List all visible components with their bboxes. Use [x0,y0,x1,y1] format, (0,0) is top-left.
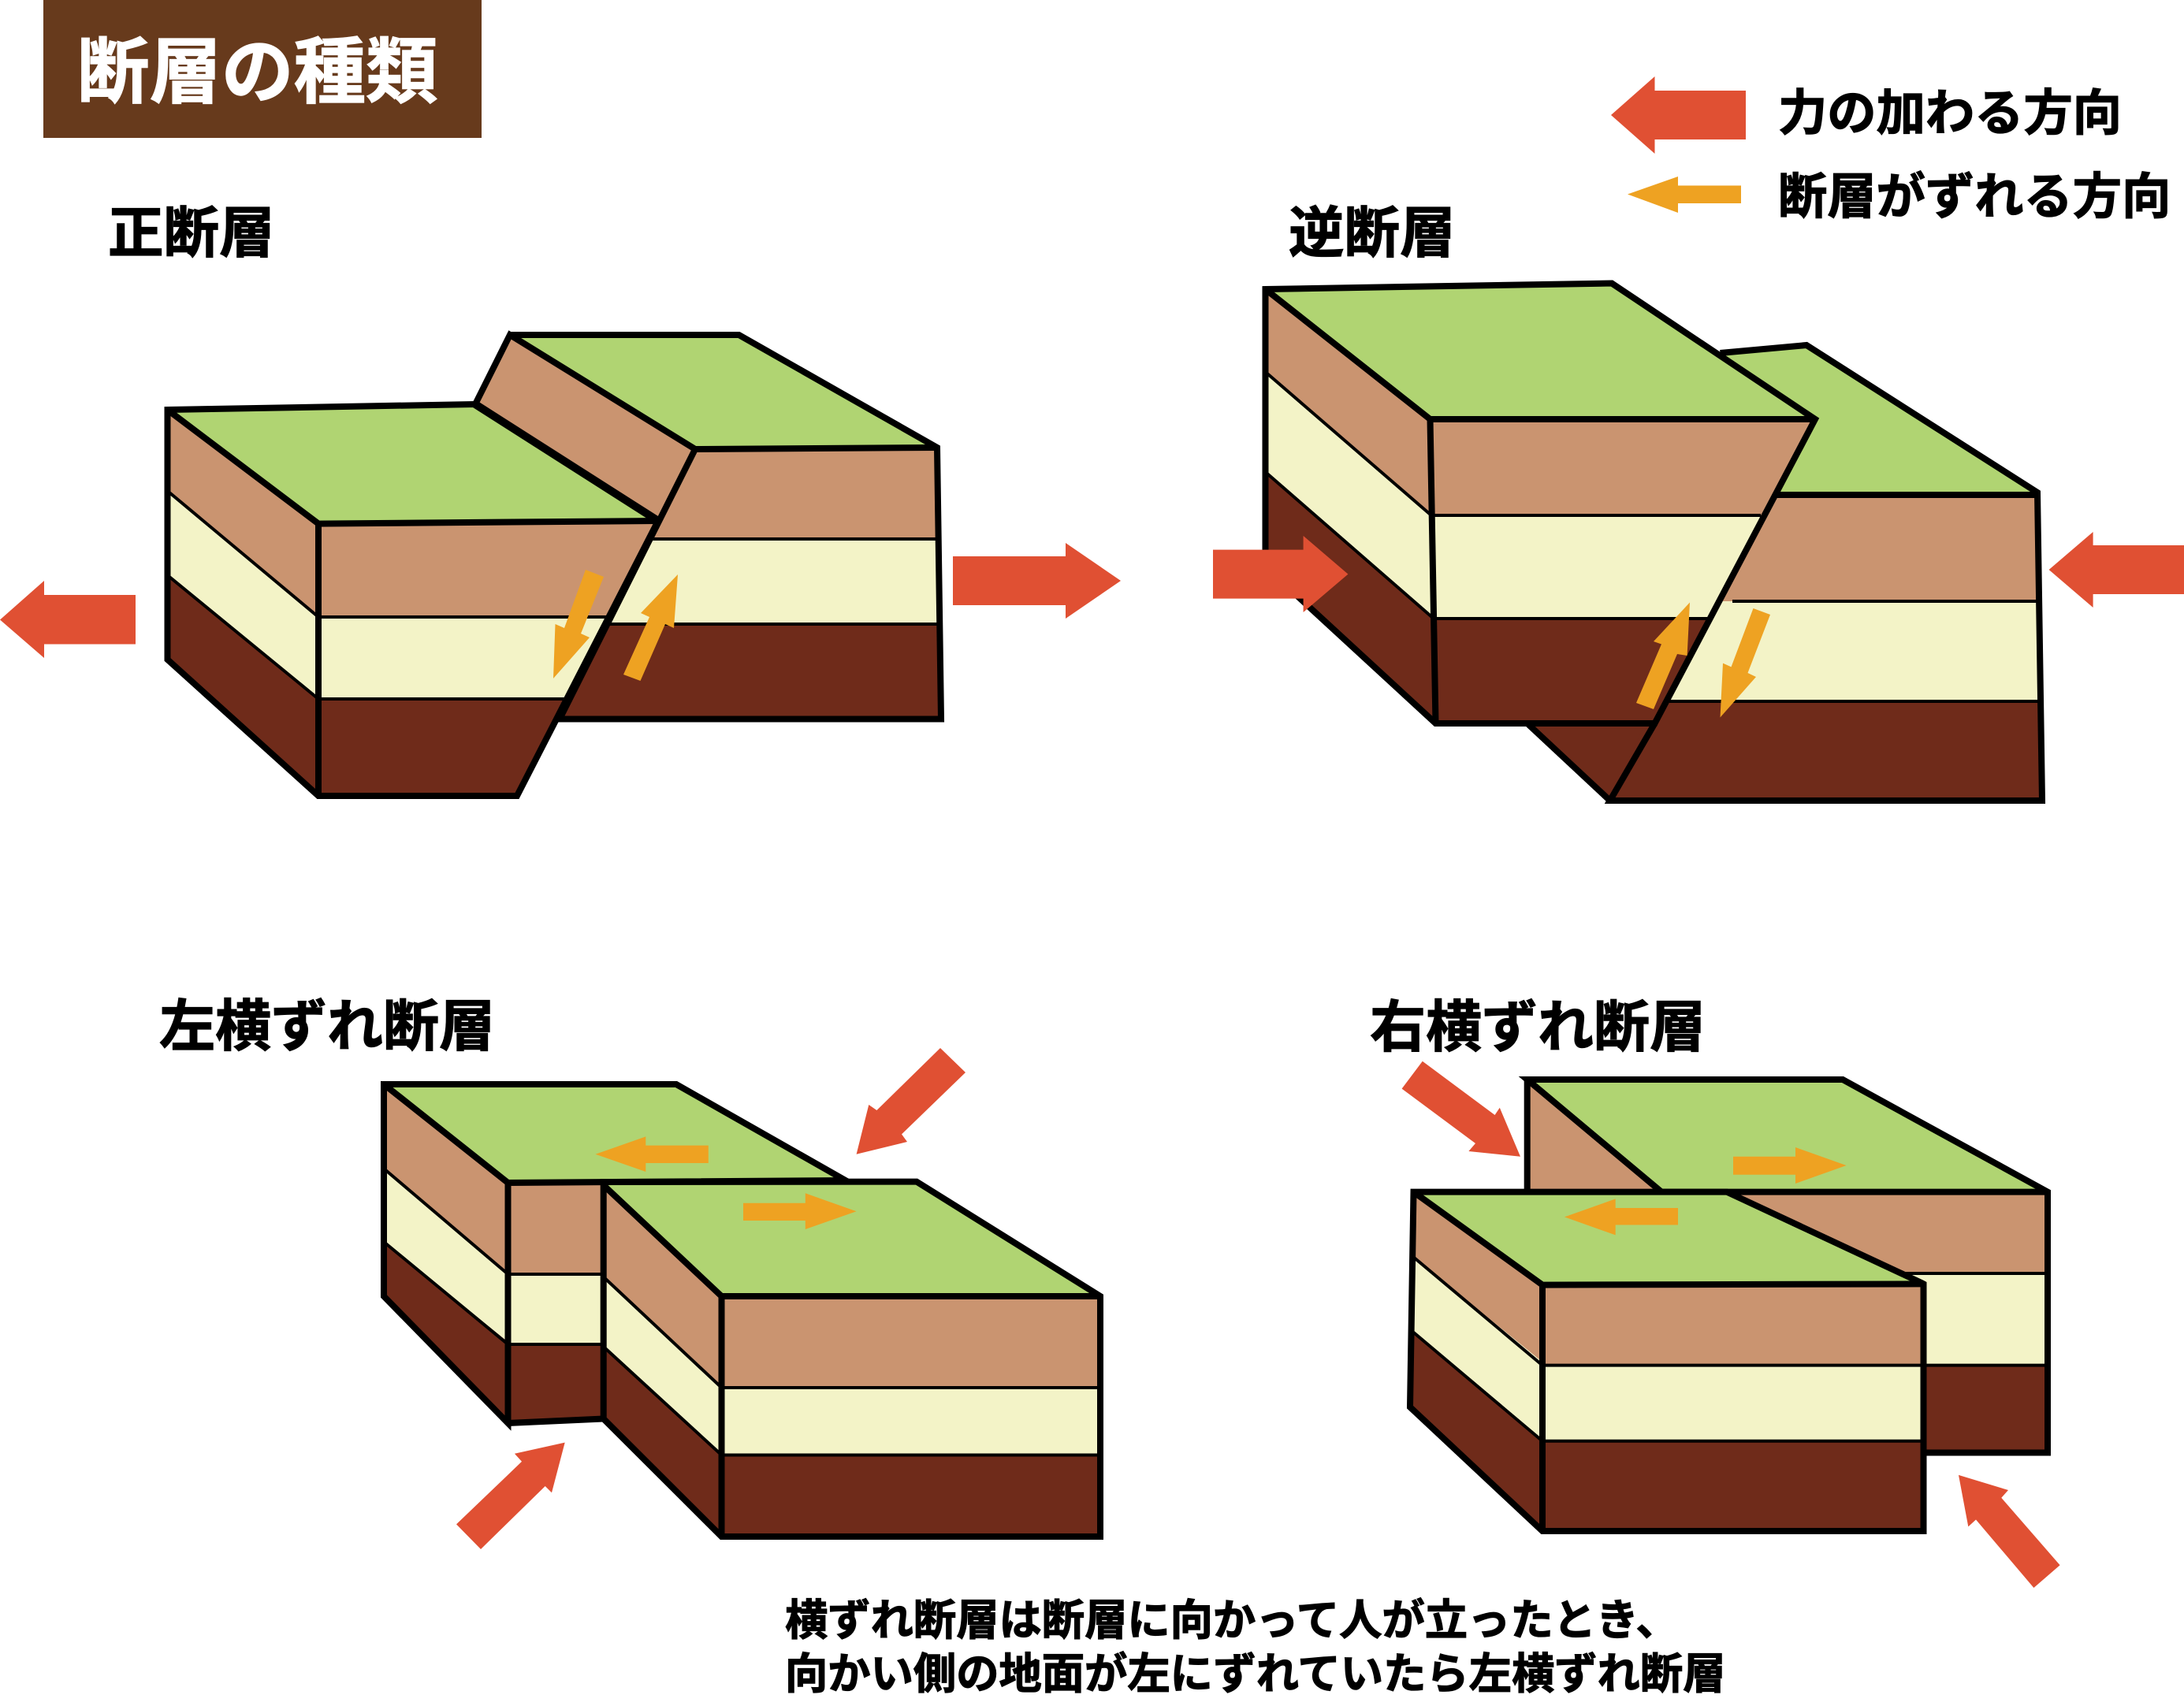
heading: normal fault: 正断層 [108,202,274,264]
arrow: compression from top left [1402,1061,1520,1157]
arrow: tension left [0,581,136,658]
arrow: compression left [2049,532,2184,608]
panel: left-lateral fault [159,996,1100,1549]
arrow: slip down [1720,608,1770,717]
title banner [43,0,482,138]
explanatory note: 横ずれ断層は断層に向かって人が立ったとき、 [785,1596,1679,1645]
panel: right-lateral fault [1370,997,2060,1588]
legend: fault slip arrow [1628,177,1741,213]
arrow: compression from bottom right [1959,1475,2060,1588]
explanatory note: 向かい側の地面が左にずれていたら左横ずれ断層 [785,1650,1725,1698]
panel: normal fault [0,202,1121,796]
arrow: compression right [1213,536,1348,612]
title banner: 断層の種類 [77,32,438,113]
arrow: slip up [623,574,678,681]
arrow: compression from bottom left [456,1443,565,1549]
block: rear right [1527,1080,2048,1453]
legend: fault slip label: 断層がずれる方向 [1778,170,2171,225]
heading: left-lateral fault: 左横ずれ断層 [159,996,495,1058]
arrow: slip down [553,570,604,678]
block: upper right [475,335,941,719]
block: rear left [384,1084,846,1423]
panel: reverse fault [1213,202,2184,801]
block: front left [1410,1192,1923,1533]
arrow: slip right [1733,1147,1847,1184]
arrow: slip up [1636,602,1690,709]
heading: right-lateral fault: 右横ずれ断層 [1370,997,1706,1059]
explanatory note [785,1596,1725,1698]
arrow: slip left [596,1136,709,1172]
block: front left [1266,284,1815,723]
arrow: tension right [953,543,1121,619]
arrow: compression from top right [857,1048,965,1154]
block: front right [604,1182,1100,1538]
block: rear right [1527,345,2042,801]
legend: force direction arrow [1611,76,1746,154]
legend [1611,76,2171,225]
legend: force direction label: 力の加わる方向 [1778,87,2122,141]
block: lower left [167,404,658,796]
arrow: slip left [1565,1199,1678,1235]
arrow: slip right [743,1193,857,1229]
heading: reverse fault: 逆断層 [1289,202,1455,264]
